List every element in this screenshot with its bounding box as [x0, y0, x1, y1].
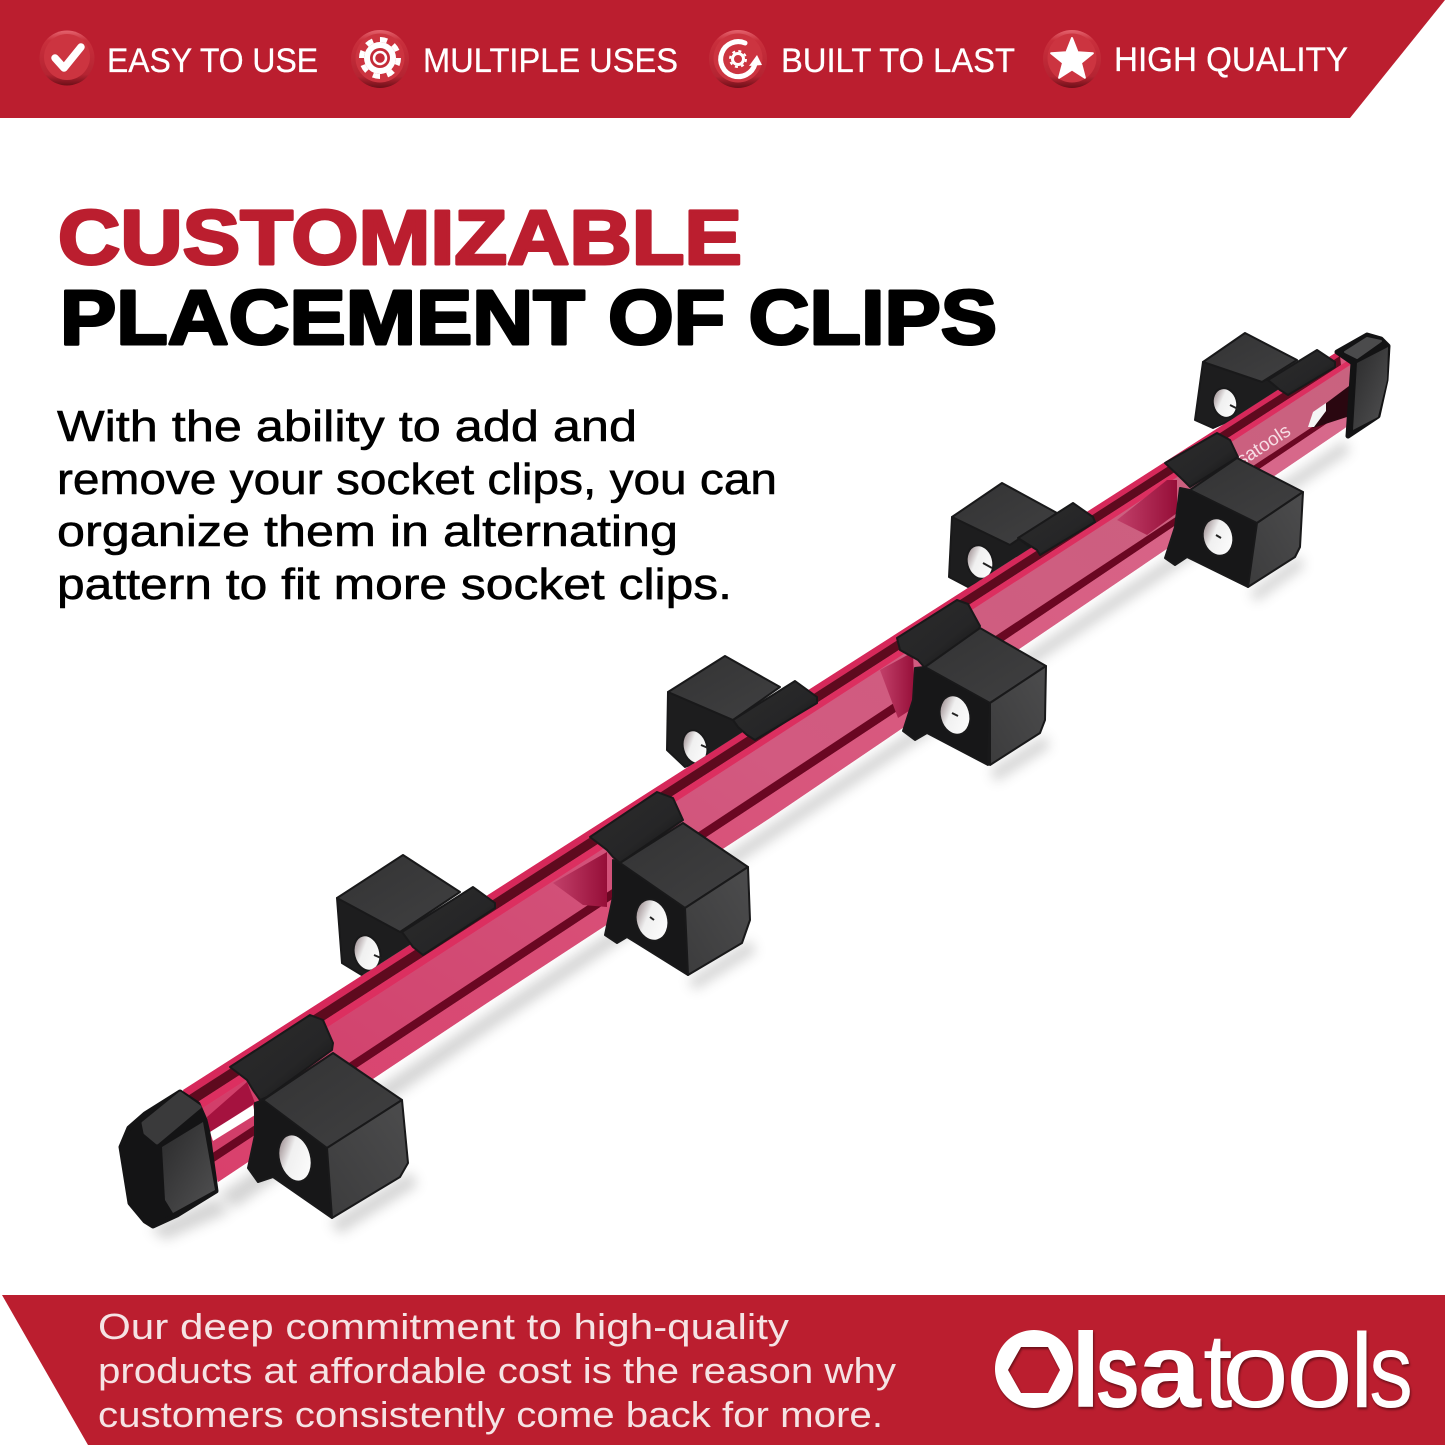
- logo: Olsatools: t: [1203, 1312, 1232, 1430]
- back clip 2: [667, 656, 817, 767]
- top banner: [0, 0, 1445, 118]
- rail upper groove: [186, 356, 1341, 1107]
- heading: CUSTOMIZABLE: [58, 195, 742, 281]
- logo: Olsatools: a: [1138, 1312, 1202, 1430]
- rail end opening, left: [207, 1082, 255, 1133]
- commitment text: products at affordable cost is the reason why: [98, 1350, 896, 1391]
- heading: [58, 195, 997, 361]
- rail lower band: [211, 405, 1355, 1182]
- rail flat face: [192, 362, 1355, 1156]
- rail top lip: [183, 341, 1355, 1097]
- darker see-through shapes near the clips: [553, 852, 607, 907]
- body text: organize them in alternating: [57, 507, 678, 556]
- front clip 1: [230, 1015, 408, 1218]
- front clip 2: [590, 792, 750, 975]
- icon: gear badge: [351, 30, 409, 88]
- label: built to last: BUILT TO LAST: [781, 42, 1015, 80]
- icon: star badge: [1043, 30, 1101, 88]
- right end cap: [1337, 335, 1388, 436]
- label: multiple uses: MULTIPLE USES: [423, 42, 678, 80]
- logo: Olsatools: s: [1095, 1312, 1140, 1430]
- logo: Olsatools: l: [1350, 1312, 1374, 1430]
- heading: PLACEMENT OF CLIPS: [60, 275, 997, 361]
- label: high quality: HIGH QUALITY: [1114, 41, 1348, 79]
- logo: Olsatools: l: [1071, 1312, 1100, 1430]
- logo: Olsatools: o: [1286, 1312, 1353, 1430]
- front clip 4: [1165, 433, 1303, 587]
- body text: pattern to fit more socket clips.: [57, 560, 732, 609]
- logo: Olsatools: [995, 1312, 1413, 1430]
- commitment text: [98, 1306, 896, 1435]
- commitment text: customers consistently come back for more.: [98, 1394, 883, 1435]
- left end cap: [121, 1092, 216, 1226]
- back clip 4: [1195, 333, 1335, 428]
- commitment text: Our deep commitment to high-quality: [98, 1306, 789, 1347]
- front clip 3: [897, 600, 1046, 765]
- rail: [183, 341, 1355, 1182]
- label: easy to use: EASY TO USE: [107, 42, 318, 80]
- body text: remove your socket clips, you can: [57, 455, 777, 504]
- rail end opening, right: [1313, 383, 1353, 428]
- rail upper lip: [190, 356, 1355, 1115]
- rail brand text: Olsatools: [1217, 421, 1295, 481]
- body text: With the ability to add and: [57, 402, 637, 451]
- icon: circular arrow gear badge: [709, 30, 767, 88]
- body text: [57, 402, 777, 609]
- back clip 3: [949, 483, 1095, 587]
- bottom banner: [2, 1295, 1445, 1445]
- rail lower groove: [208, 406, 1344, 1164]
- soft ground shadow: [150, 440, 1350, 1240]
- icon: check mark badge: [40, 30, 94, 86]
- back clip 1: [337, 855, 495, 977]
- product: socket rail with clips: [121, 333, 1388, 1240]
- logo: Olsatools: o: [1222, 1312, 1289, 1430]
- logo: Olsatools: s: [1369, 1312, 1413, 1430]
